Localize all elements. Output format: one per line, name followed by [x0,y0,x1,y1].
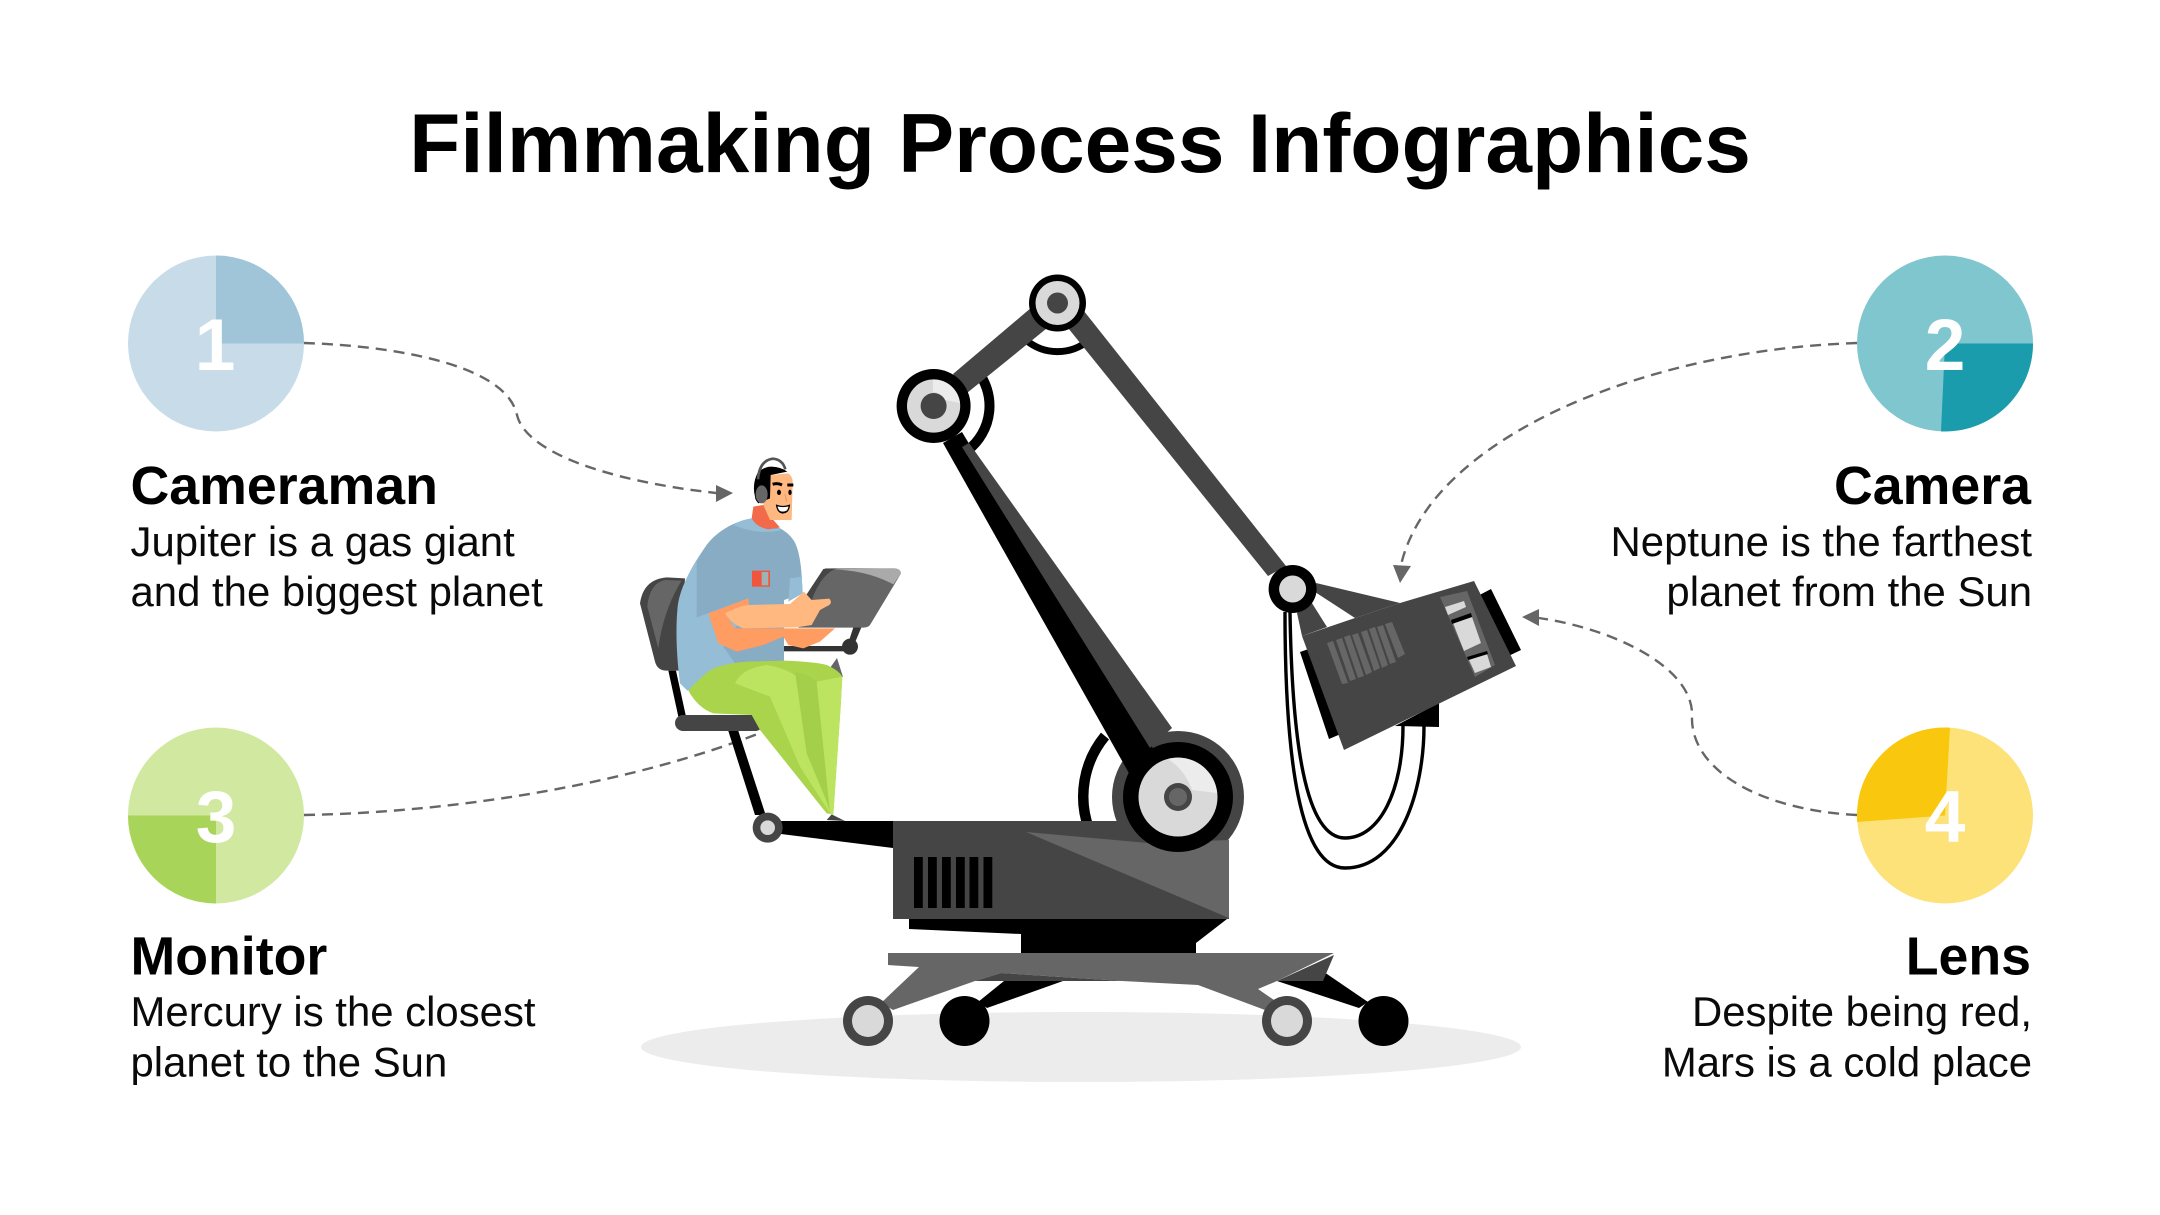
crane wheel base [843,953,1408,1046]
text: cameraman description: and the biggest planet [130,568,543,615]
tablet stand [784,627,861,655]
icon: pie badge 4 [1857,727,2033,904]
title: Filmmaking Process Infographics [409,96,1751,190]
illustration: camera crane [778,274,1521,1046]
heading: monitor: Monitor [130,926,327,986]
text: camera description: planet from the Sun [1666,568,2032,615]
text: lens description: Despite being red, [1692,988,2032,1035]
heading: lens: Lens [1906,926,2031,986]
base joint outer ring and arc [1083,731,1244,863]
icon: pie badge 2 [1857,256,2033,432]
tablet [798,568,901,628]
connector: step 2 to camera [1393,343,1857,583]
body: neck and head [752,459,793,529]
icon: pie badge 4: 4 [1925,777,1966,858]
text: lens description: Mars is a cold place [1662,1038,2032,1086]
icon: pie badge 3: 3 [196,777,236,858]
heading: camera: Camera [1834,456,2032,516]
arms [708,598,835,652]
text: cameraman description: Jupiter is a gas giant [130,518,515,565]
connector: step 1 to cameraman [304,343,733,502]
icon: pie badge 2: 2 [1925,305,1965,386]
heading: cameraman: Cameraman [130,456,438,516]
text: monitor description: planet to the Sun [130,1038,447,1086]
forearm and hand [725,592,831,628]
body: shirt [676,518,803,691]
illustration: cameraman on chair [640,459,901,843]
cables [1285,612,1424,868]
icon: pie badge 1: 1 [195,305,235,386]
crane body [778,821,1229,953]
film camera [1269,565,1521,750]
panel: step 4 lens [1662,727,2033,1086]
text: camera description: Neptune is the farthest [1611,518,2032,565]
crane arms and joints [897,274,1286,852]
connector: step 4 to lens [1522,609,1857,815]
connector: step 3 to monitor [304,658,843,815]
chair [640,577,845,843]
panel: step 1 cameraman [128,256,543,615]
icon: pie badge 1 [128,256,304,432]
icon: pie badge 3 [128,728,304,904]
panel: step 3 monitor [128,728,536,1086]
ground shadow [641,1012,1521,1082]
pants [688,661,842,814]
text: monitor description: Mercury is the closest [130,988,536,1035]
panel: step 2 camera [1611,256,2033,615]
